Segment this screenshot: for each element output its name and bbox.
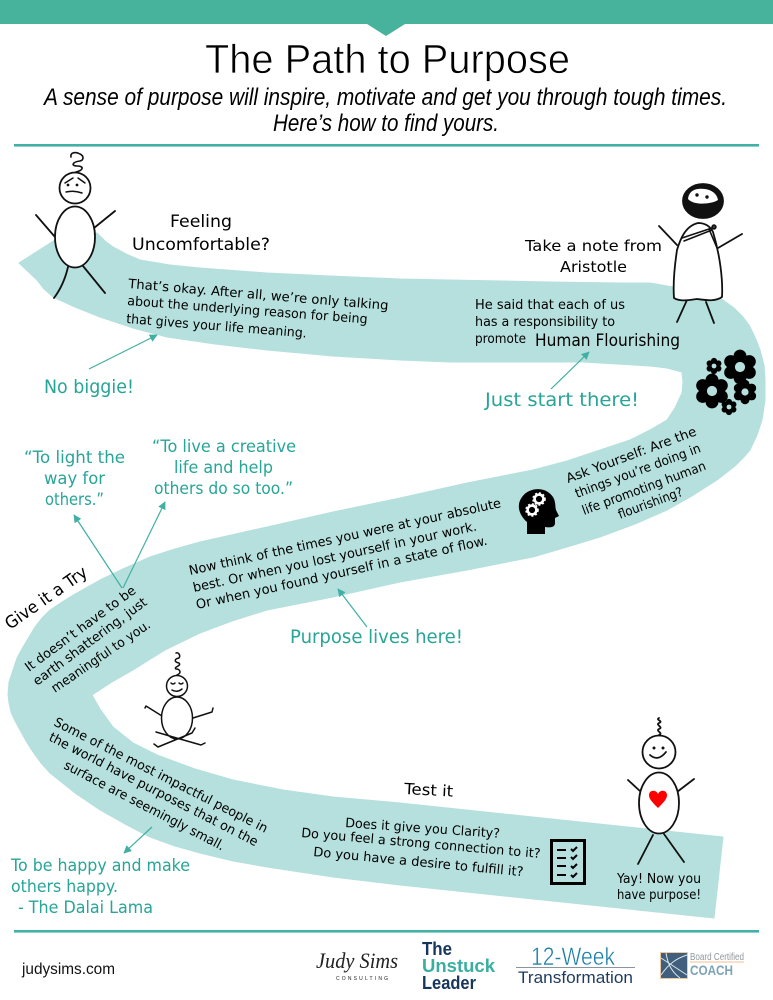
quote: light the way: others.” [45,490,104,510]
winding path [8,233,765,918]
subtitle [42,84,727,137]
logo: The Unstuck Leader [422,938,496,993]
text: test questions: Does it give you Clarity? [345,816,500,842]
text: responsibility: Human Flourishing [535,331,680,350]
heading: Aristotle: Take a note from [524,237,662,255]
quote: creative life [152,437,296,499]
heading: Aristotle: Aristotle [560,258,627,276]
text: test questions: Do you have a desire to fulfill it? [313,845,524,880]
arrow: no biggie [89,335,157,369]
icon: heart [649,791,667,808]
icon: checklist [552,840,584,884]
quote: creative life: life and help [174,458,273,478]
text: test questions [301,816,541,880]
text: that's okay: That’s okay. After all, we’re only talking [127,277,389,314]
quote: light the way [24,448,125,510]
figure: uncomfortable person [36,153,115,298]
icon: flowers [696,350,756,415]
quote: light the way: “To light the [24,448,125,468]
text: doesn't have to be: earth shattering, just [30,595,150,689]
quote: creative life: others do so too.” [154,479,293,499]
logo: Judy Sims Consulting: CONSULTING [336,976,388,982]
text: doesn't have to be: It doesn’t have to be [22,583,139,675]
footer: website: judysims.com [21,961,115,978]
quote: Dalai Lama: others happy. [11,877,118,897]
text: responsibility: has a responsibility to [475,314,615,330]
heading: test it: Test it [403,780,454,801]
logo: Judy Sims Consulting [316,948,398,982]
logo: The Unstuck Leader: Leader [422,972,476,993]
logo: Board Certified Coach [660,952,744,978]
arrows: quotes [74,502,165,588]
callout: purpose lives here: Purpose lives here! [290,626,463,648]
text: responsibility [475,297,680,350]
text: responsibility: He said that each of us [475,297,625,313]
arrow: just start there [551,352,589,389]
text: test questions: Do you feel a strong connection to it? [301,826,541,862]
text: think of the times: best. Or when you lost yourself in your work. [192,519,478,596]
quote: light the way: way for [44,469,105,489]
logo: 12-Week Transformation: 12-Week [531,943,615,971]
heading: feeling uncomfortable: Uncomfortable? [132,235,270,255]
text: think of the times [188,496,503,613]
text: yay [616,871,701,903]
text: ask yourself [564,425,708,523]
subtitle: Here’s how to find yours. [273,110,499,137]
logo: The Unstuck Leader: The [422,938,452,959]
text: that's okay: about the underlying reason for being [127,294,368,327]
logo: 12-Week Transformation [516,943,635,987]
logo: 12-Week Transformation: Transformation [518,969,633,987]
text: yay: have purpose! [617,887,701,903]
logo: Board Certified Coach: COACH [690,962,733,978]
title: The Path to Purpose [205,36,570,82]
text: yay: Yay! Now you [616,871,701,887]
quote: Dalai Lama: - The Dalai Lama [18,898,153,918]
callout: just start there: Just start there! [484,389,639,411]
text: that's okay: that gives your life meaning. [126,312,307,342]
heading: feeling uncomfortable: Feeling [170,212,232,232]
text: most impactful people: Some of the most impactful people in [51,715,270,837]
text: doesn't have to be: meaningful to you. [49,618,154,696]
text: that's okay [126,277,389,342]
logo: The Unstuck Leader: Unstuck [422,955,496,976]
text: most impactful people: the world have purposes that on the [46,730,260,850]
text: think of the times: Or when you found yourself in a state of flow. [195,534,489,613]
logo: Judy Sims Consulting: Judy Sims [316,948,398,973]
heading: Aristotle [524,237,662,276]
text: think of the times: Now think of the times you were at your absolute [188,496,503,579]
arrow: dalai lama [124,827,152,853]
quote: Dalai Lama: To be happy and make [10,856,190,876]
figure: happy person [628,718,694,864]
logo: Board Certified Coach: Board Certified [690,952,744,963]
text: ask yourself: things you’re doing in [573,441,703,502]
quote: Dalai Lama [10,856,190,918]
figure: meditating person [145,653,213,747]
icon: head with gears [519,489,559,534]
text: ask yourself: Ask Yourself: Are the [564,425,699,487]
text: ask yourself: flourishing? [616,485,685,523]
text: responsibility: promote [475,331,526,347]
text: ask yourself: life promoting human [580,459,708,519]
top banner [0,0,773,36]
arrow: purpose lives here [338,589,367,627]
heading: feeling uncomfortable [132,212,270,255]
heading: give it a try: Give it a Try [1,563,92,634]
text: most impactful people: surface are seemingly small. [61,758,227,854]
callout: no biggie: No biggie! [44,376,134,398]
figure: Aristotle [659,184,742,323]
quote: creative life: “To live a creative [152,437,296,457]
